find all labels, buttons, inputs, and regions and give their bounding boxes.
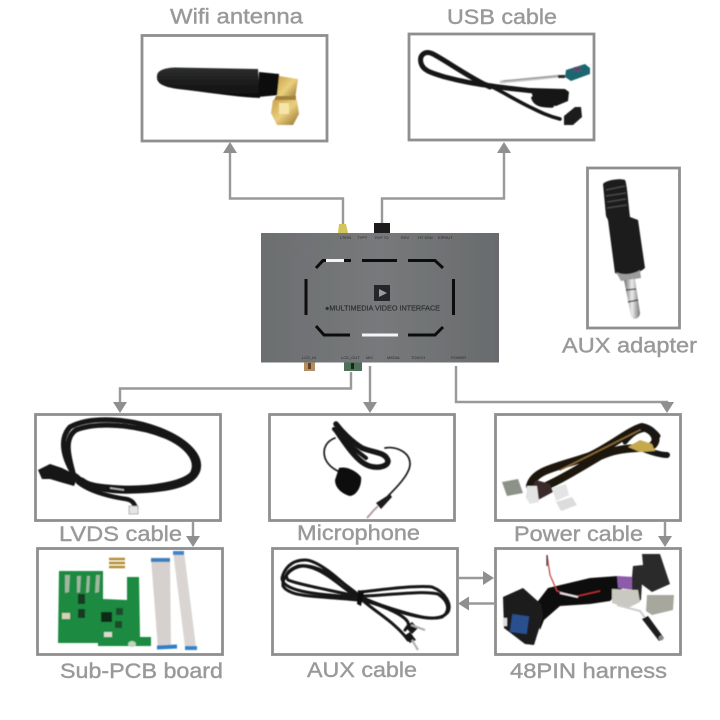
arrow: AUX cable to 48PIN harness	[458, 571, 494, 585]
port labels	[302, 235, 466, 360]
connector: USB	[374, 223, 390, 234]
icon: USB cable photo	[421, 53, 590, 125]
arrow: device to Wifi antenna	[223, 142, 343, 225]
arrow: 48PIN harness to AUX cable	[458, 596, 494, 610]
arrow: device to Microphone	[363, 366, 377, 413]
device caption: ●MULTIMEDIA VIDEO INTERFACE	[325, 304, 440, 312]
port labels: MIC	[366, 355, 373, 360]
arrow: device to LVDS cable	[113, 372, 351, 413]
icon: 48PIN harness photo	[503, 554, 674, 645]
arrow: device to Power cable	[456, 366, 674, 413]
enclosure	[261, 233, 499, 362]
device: multimedia video interface box	[261, 223, 499, 371]
port labels: HT SSN	[418, 235, 433, 240]
label: Wifi antenna: Wifi antenna	[170, 4, 303, 28]
label: Microphone: Microphone	[297, 521, 420, 545]
icon: 3.5mm jack plug photo	[603, 179, 645, 319]
icon: PCB board photo	[58, 551, 197, 650]
port labels: EIPHUT	[438, 235, 453, 240]
port labels: MEDIA	[387, 355, 400, 360]
panel: LVDS cable	[36, 414, 220, 520]
port labels: TYPT	[357, 235, 368, 240]
label: AUX adapter: AUX adapter	[562, 334, 697, 358]
logo	[374, 285, 390, 301]
label: AUX cable: AUX cable	[307, 658, 417, 682]
panel: AUX cable	[272, 548, 458, 654]
port labels: POWER	[451, 355, 466, 360]
panel: Wifi antenna	[142, 36, 327, 141]
decorative frame dashes	[306, 260, 454, 335]
port labels: TOUCH	[411, 355, 425, 360]
panel: Microphone	[270, 414, 454, 520]
port labels: LCD_OUT	[341, 355, 360, 360]
panel: Power cable	[496, 414, 680, 520]
connector: LVDS out	[344, 362, 362, 371]
panel: USB cable	[409, 34, 594, 140]
icon: microphone photo	[324, 424, 410, 518]
icon: wifi antenna photo	[157, 68, 299, 125]
connector: antenna SMA	[338, 224, 348, 233]
port labels: LTE/N	[340, 235, 351, 240]
white highlights	[326, 259, 398, 336]
label: Power cable: Power cable	[514, 522, 643, 546]
port labels: LCD_IN	[302, 355, 316, 360]
icon: AUX cable photo	[282, 560, 449, 650]
icon: LVDS cable photo	[38, 420, 199, 514]
icon: power cable photo	[502, 427, 667, 511]
panel: 48PIN harness	[496, 548, 680, 654]
arrow: device to USB cable	[382, 142, 511, 225]
arrow: Power cable to 48PIN harness	[658, 522, 672, 547]
panel: AUX adapter	[588, 168, 680, 328]
label: 48PIN harness: 48PIN harness	[510, 659, 667, 683]
label: LVDS cable: LVDS cable	[59, 522, 182, 546]
label: Sub-PCB board: Sub-PCB board	[60, 659, 223, 683]
port labels: RSV	[401, 235, 410, 240]
port labels: RVF S1	[375, 235, 390, 240]
panel: Sub-PCB board	[38, 548, 222, 654]
connector: LVDS in	[304, 362, 315, 371]
label: USB cable: USB cable	[447, 5, 557, 29]
arrow: LVDS cable to Sub-PCB board	[186, 522, 200, 547]
